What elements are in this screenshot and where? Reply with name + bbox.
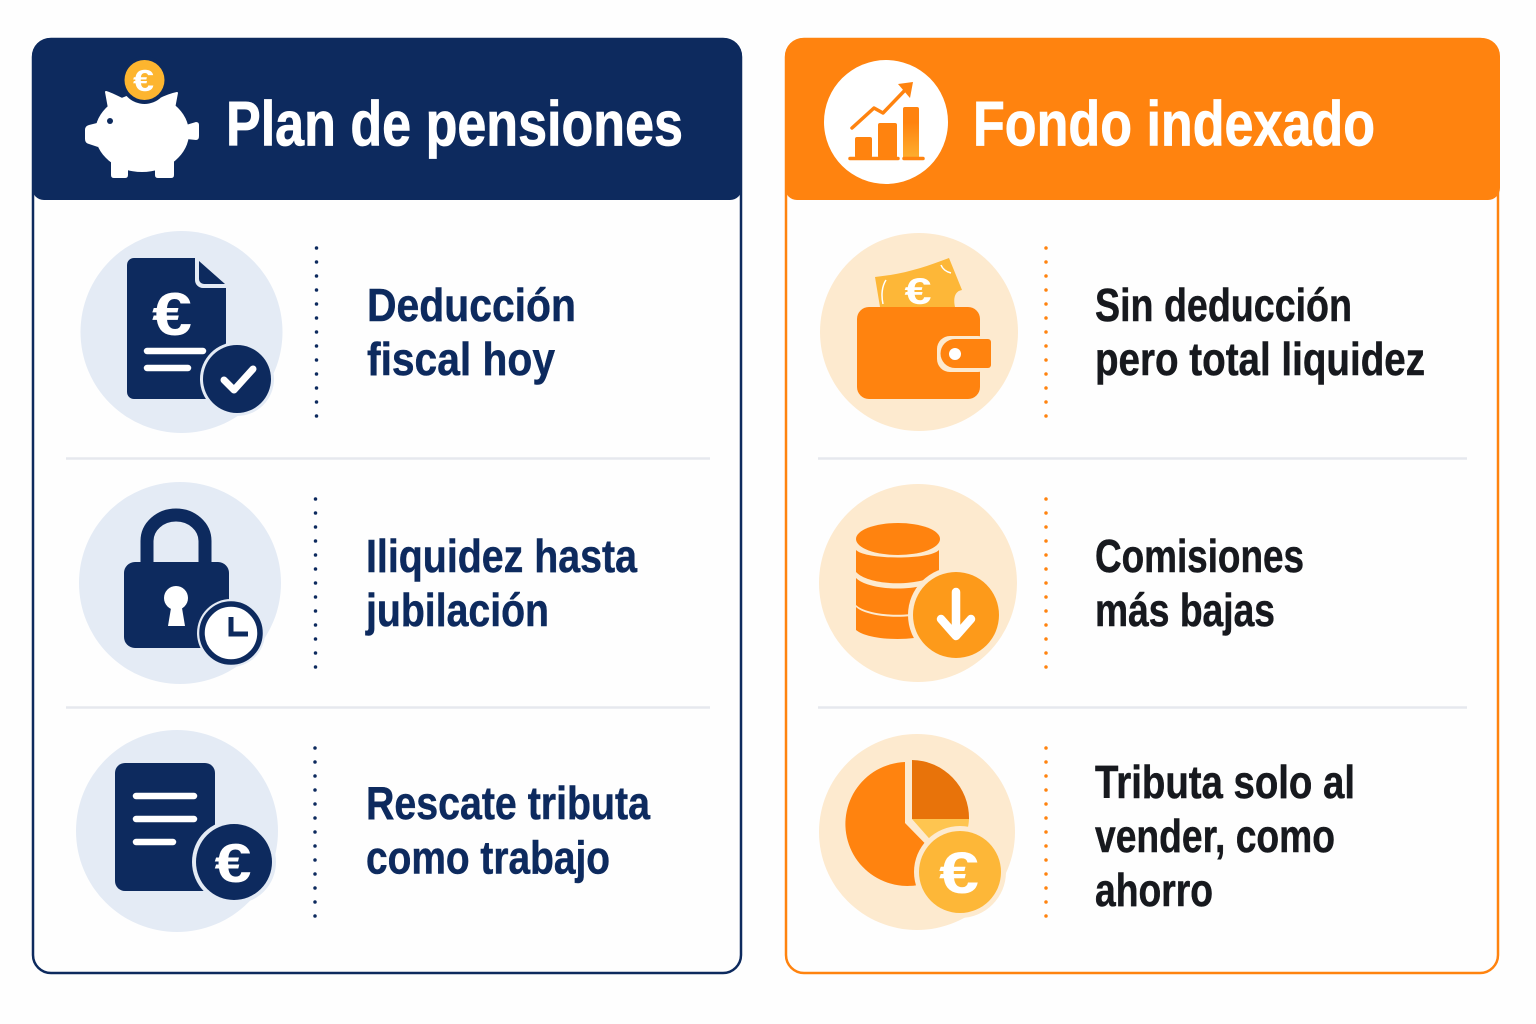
icon: piggy bank with coin (85, 56, 199, 178)
heading: Fondo indexado: Fondo indexado (973, 90, 1375, 160)
dotted separator (315, 248, 318, 417)
heading: Plan de pensiones: Plan de pensiones (226, 90, 683, 160)
text: Tributa solo al vender, como ahorro: ahorro (1095, 864, 1213, 916)
text: Deducción fiscal hoy (367, 279, 576, 385)
icon: pie chart with euro coin (819, 734, 1015, 930)
text: Tributa solo al vender, como ahorro (1095, 756, 1355, 916)
dotted separator (1044, 499, 1048, 668)
row: Tributa solo al vender, como ahorro (819, 734, 1355, 930)
text: Rescate tributa como trabajo (366, 777, 650, 884)
text: Tributa solo al vender, como ahorro: vender, como (1095, 810, 1335, 862)
text: Iliquidez hasta jubilación: jubilación (365, 584, 549, 636)
icon: growth chart (824, 60, 948, 184)
text: Rescate tributa como trabajo: Rescate tributa (366, 777, 650, 829)
text: Deducción fiscal hoy: fiscal hoy (367, 333, 555, 385)
panel: Plan de pensiones (32, 38, 742, 973)
text: Rescate tributa como trabajo: como trabajo (366, 832, 610, 884)
text: Deducción fiscal hoy: Deducción (367, 279, 576, 331)
text: Iliquidez hasta jubilación: Iliquidez hasta (366, 530, 637, 582)
text: Sin deducción pero total liquidez: Sin deducción (1095, 279, 1352, 331)
icon: tax document with check: € (152, 281, 192, 348)
text: Tributa solo al vender, como ahorro: Tributa solo al (1095, 756, 1355, 808)
header: Plan de pensiones (32, 38, 742, 200)
icon: padlock with clock (79, 482, 281, 684)
text: Sin deducción pero total liquidez: pero total liquidez (1095, 333, 1425, 385)
row: Deducción fiscal hoy (80, 231, 576, 433)
text: Comisiones más bajas: más bajas (1095, 584, 1275, 636)
icon: wallet with banknote (820, 233, 1018, 431)
dotted separator (314, 499, 317, 668)
text: Comisiones más bajas (1095, 530, 1304, 636)
dotted separator (313, 748, 317, 917)
icon: coin stack with down arrow (819, 484, 1017, 682)
row: Sin deducción pero total liquidez (820, 233, 1425, 431)
text: Comisiones más bajas: Comisiones (1095, 530, 1304, 582)
dotted separator (1044, 748, 1048, 917)
icon: tax document with check (80, 231, 282, 433)
icon: document with euro coin: € (214, 832, 252, 894)
row: Comisiones más bajas (819, 484, 1304, 682)
icon: wallet with banknote: € (904, 271, 932, 312)
icon: pie chart with euro coin: € (939, 841, 979, 906)
text: Sin deducción pero total liquidez (1095, 279, 1425, 385)
dotted separator (1044, 248, 1048, 417)
icon: document with euro coin (76, 730, 278, 932)
row: Rescate tributa como trabajo (76, 730, 650, 932)
panel: Fondo indexado (785, 38, 1500, 973)
row: Iliquidez hasta jubilación (79, 482, 637, 684)
header: Fondo indexado (785, 38, 1500, 200)
text: Iliquidez hasta jubilación (365, 530, 637, 636)
icon: piggy bank with coin: € (133, 63, 154, 98)
